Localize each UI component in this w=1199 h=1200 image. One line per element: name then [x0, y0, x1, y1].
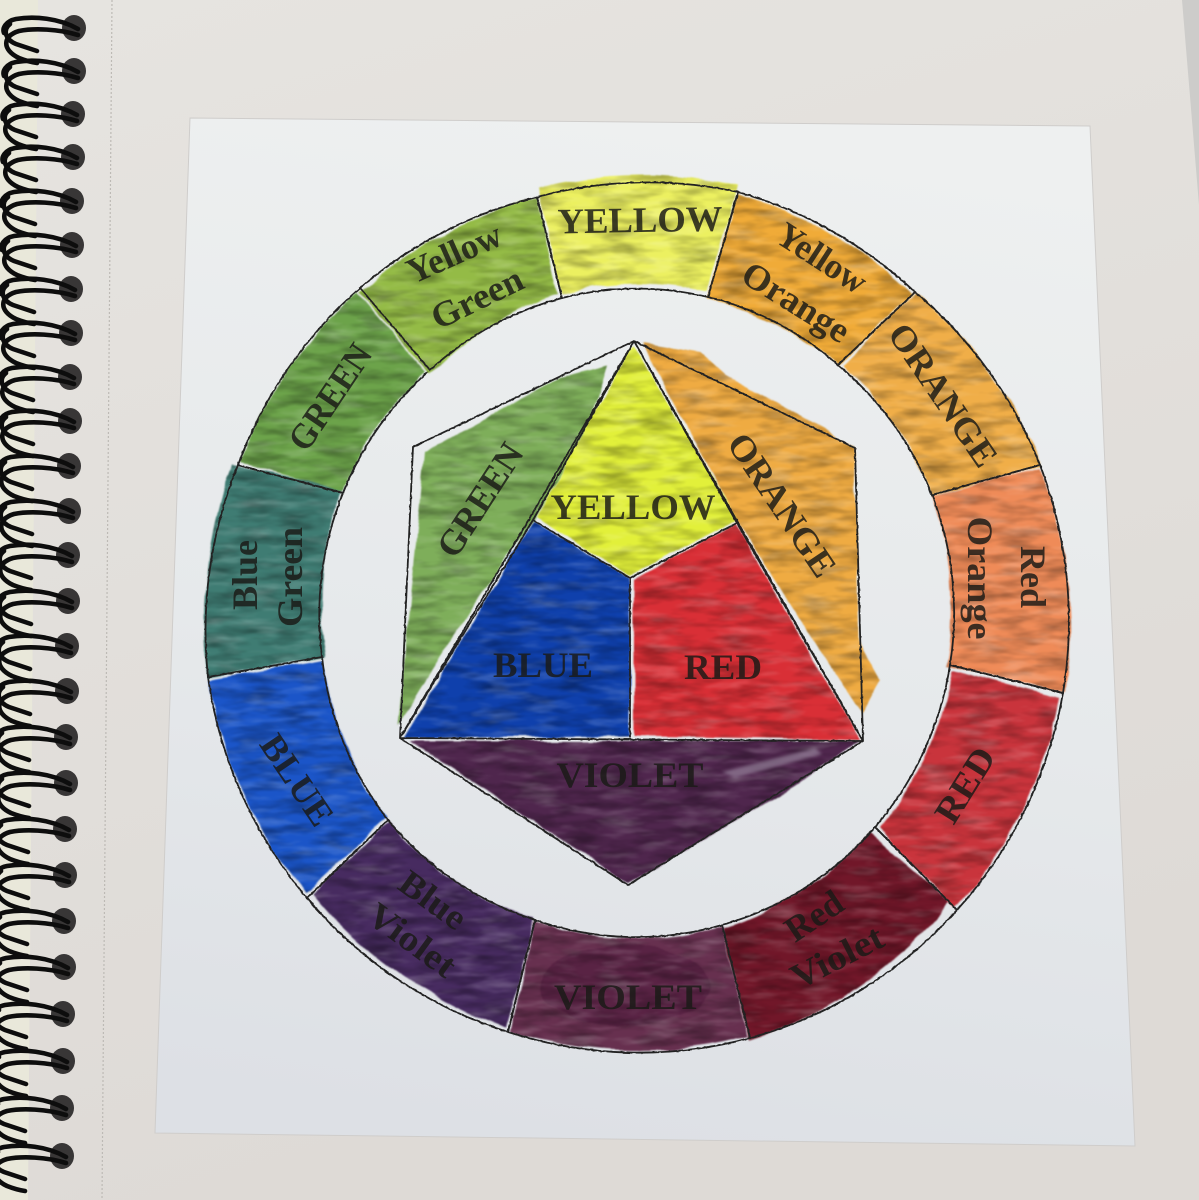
segment: blue violet [307, 820, 535, 1032]
segment: blue violet: Blue [391, 862, 475, 938]
segment: blue green: Blue [225, 540, 265, 610]
color wheel ring [204, 175, 1071, 1053]
facet: red primary [634, 524, 860, 740]
segment: orange: ORANGE [880, 316, 1006, 474]
inner hexagon color triangle [398, 341, 880, 885]
facet: orange secondary: ORANGE [719, 425, 845, 585]
segment: violet [508, 920, 750, 1053]
segment: green [238, 288, 430, 493]
spiral margin strip [0, 0, 38, 1200]
page perforation line [102, 0, 112, 1200]
segment: yellow orange: Orange [735, 253, 857, 351]
segment: red orange [932, 465, 1071, 693]
segment: red orange: Orange [960, 516, 1000, 640]
segment: red violet: Violet [784, 917, 890, 997]
segment: blue [208, 657, 388, 898]
segment: yellow [537, 175, 738, 298]
segment: violet: VIOLET [554, 977, 702, 1017]
hexagon outlines [400, 341, 863, 885]
segment: yellow green: Yellow [400, 214, 508, 292]
segment: red: RED [926, 740, 1004, 830]
white paper sheet [155, 118, 1135, 1146]
segment: red violet: Red [777, 882, 851, 950]
facet: orange secondary [642, 343, 880, 715]
segment: red violet [722, 827, 957, 1040]
segment: blue green [204, 465, 343, 677]
facet: blue primary [404, 520, 630, 738]
facet: green secondary: GREEN [428, 435, 532, 565]
segment: yellow orange: Yellow [769, 214, 875, 302]
facet: red primary: RED [684, 647, 762, 687]
segment: yellow green: Green [424, 259, 530, 337]
facet: violet secondary: VIOLET [556, 755, 704, 795]
page right edge [1182, 0, 1199, 205]
segment: yellow green [360, 197, 562, 374]
segment: red orange: Red [1013, 546, 1053, 608]
segment: orange [838, 292, 1042, 496]
segment: green: GREEN [280, 336, 380, 458]
segment: red [875, 665, 1063, 910]
facet: yellow primary [536, 347, 737, 576]
facet: green secondary [398, 366, 608, 725]
segment: blue violet: Violet [360, 894, 464, 986]
segment: blue green: Green [270, 527, 310, 627]
facet: yellow primary: YELLOW [550, 487, 716, 527]
segment: yellow orange [708, 192, 915, 365]
facet: blue primary: BLUE [493, 645, 593, 685]
spiral binding [0, 15, 86, 1191]
segment: yellow: YELLOW [557, 199, 723, 241]
facet: violet secondary [410, 741, 860, 884]
segment: blue: BLUE [252, 727, 342, 833]
